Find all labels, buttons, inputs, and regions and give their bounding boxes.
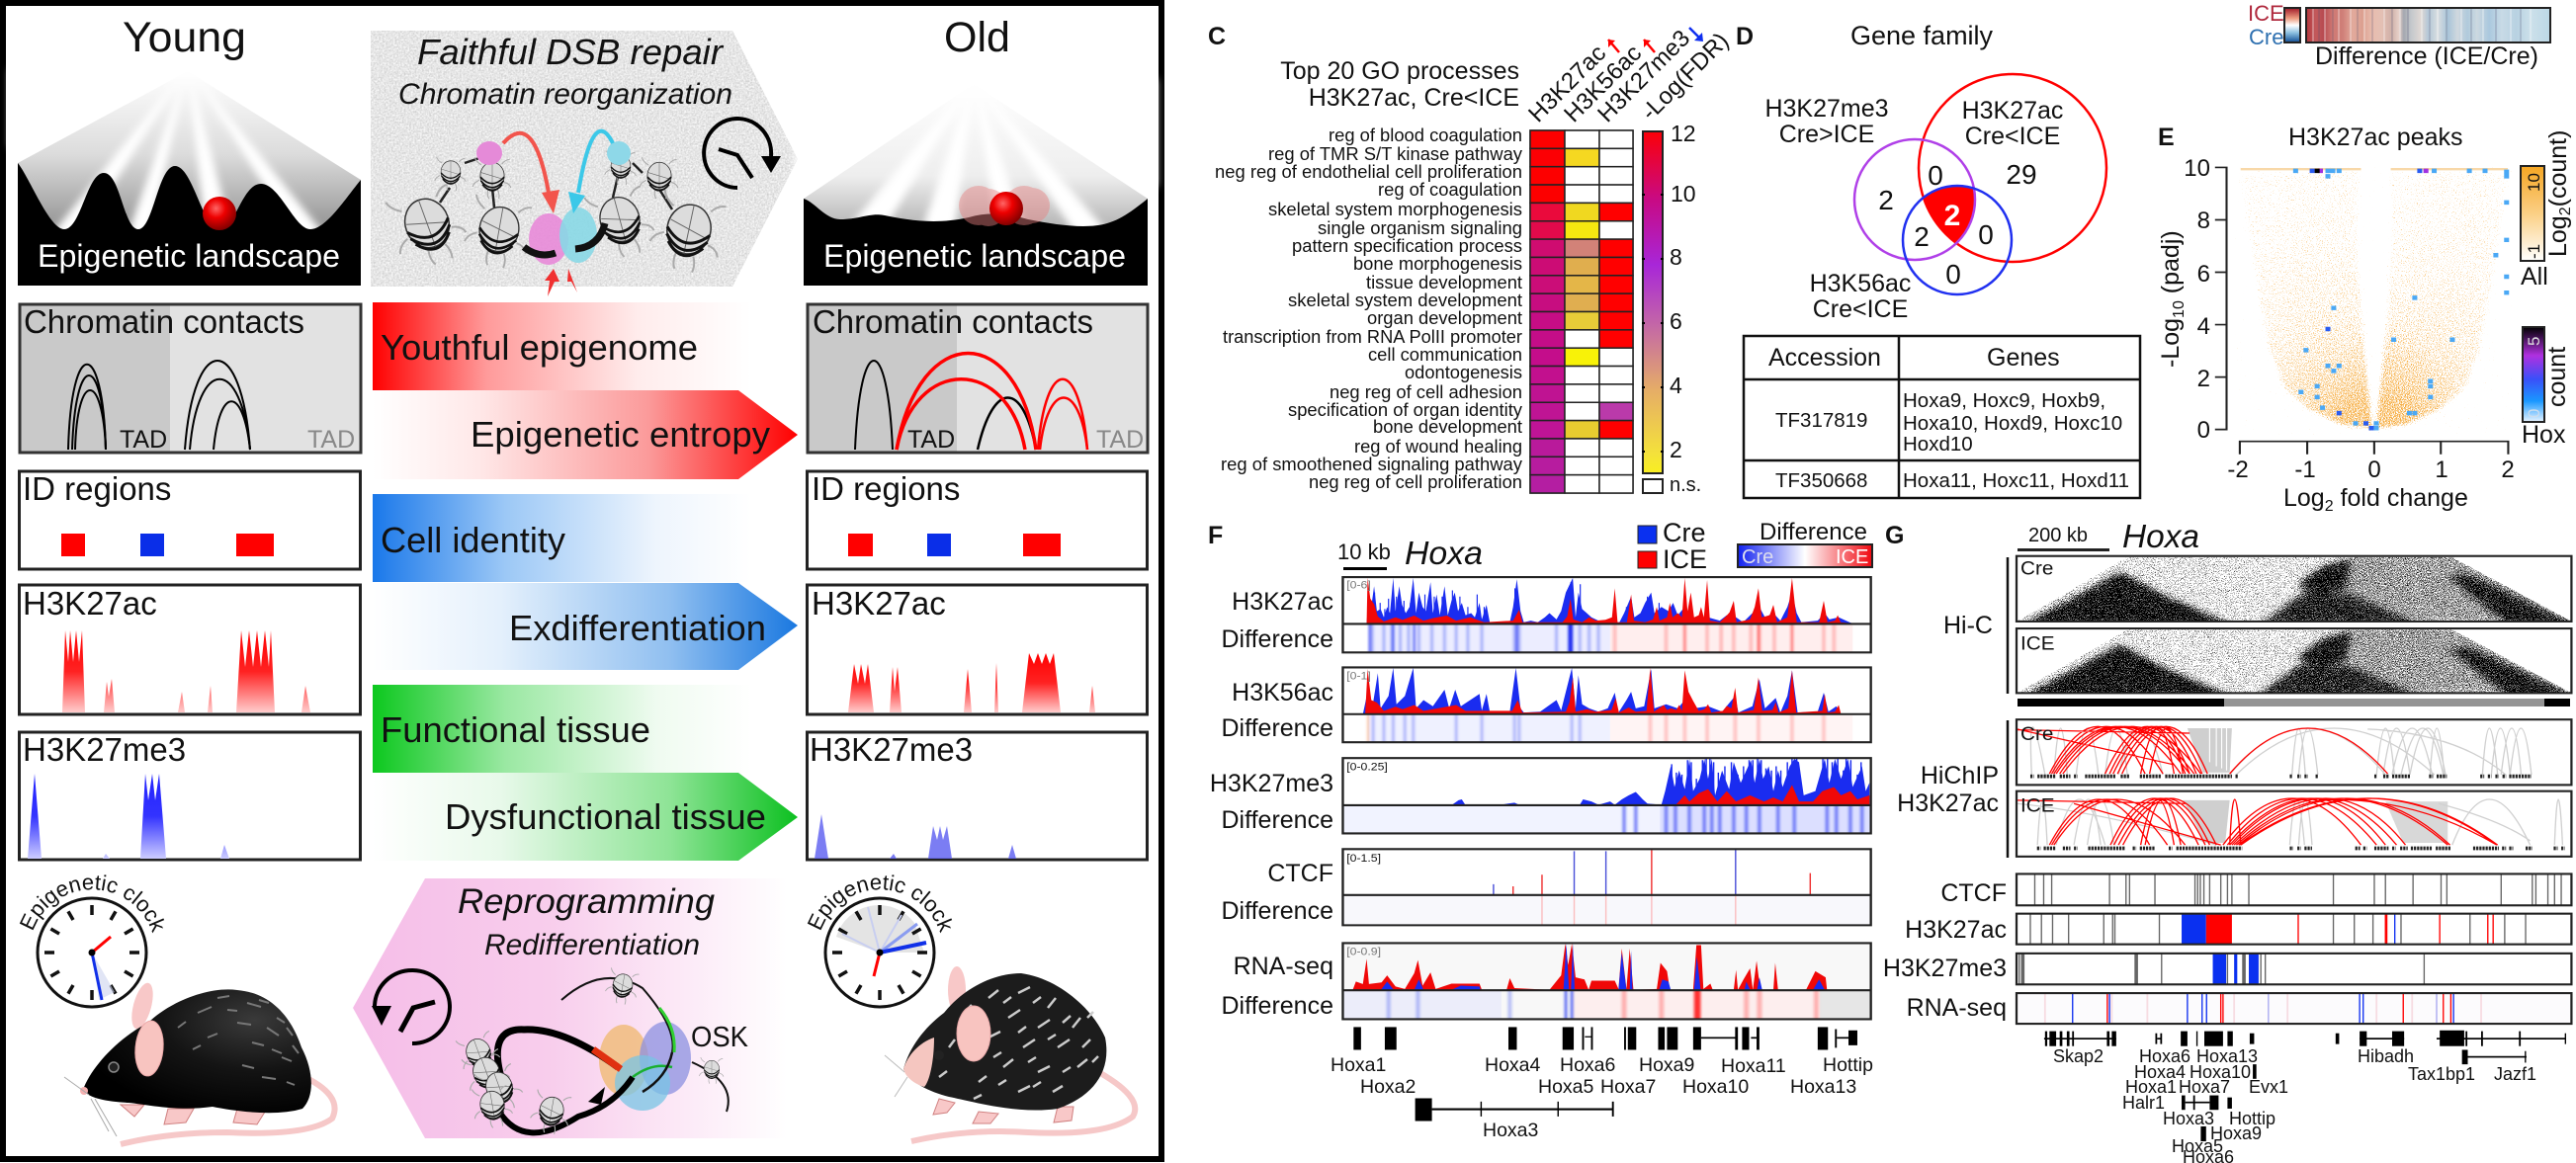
row labels: reg of wound healing: [1354, 437, 1522, 457]
band: cell identity: Cell identity: [381, 520, 565, 560]
legend: difference ICE/Cre colorbar: Cre: [2249, 25, 2283, 49]
row labels: tissue development: [1366, 273, 1522, 292]
venn diagram: 0: [1928, 160, 1943, 191]
brackets and row labels: CTCF: [1940, 879, 2007, 907]
gene models: Hoxa (F): Hoxa1: [1331, 1054, 1386, 1076]
heading: Young: Young: [123, 14, 246, 61]
row labels: neg reg of cell proliferation: [1309, 472, 1522, 492]
epigenetic landscape: young: [10, 65, 368, 286]
gene models: Hoxa (F): Hoxa6: [1560, 1054, 1615, 1076]
panel: ID regions old: ID regions: [812, 470, 960, 507]
track: H3K27ac: [1222, 577, 1871, 653]
track: CTCF: Difference: [1222, 897, 1333, 925]
legend: Hox peaks: count: [2543, 347, 2571, 407]
brackets and row labels: H3K27ac: [1897, 789, 1999, 817]
panel: ID regions young: ID regions: [23, 470, 171, 507]
panel E: volcano plot: -1: [2294, 457, 2316, 483]
axis titles: fold change: [2334, 484, 2468, 512]
colorbar: -Log(FDR): 10: [1671, 181, 1696, 207]
brackets and row labels: HiChIP: [1921, 762, 1999, 789]
axis titles: Log: [2283, 484, 2325, 512]
icon: epigenetic clock old: [807, 874, 953, 1008]
TAD domain bar: [2018, 699, 2570, 706]
gene models: Hoxa (F): Hoxa2: [1360, 1076, 1416, 1098]
gene models: Hoxa region (G): Tax1bp1: [2408, 1064, 2475, 1084]
gene models: Hoxa region (G): Hoxa3: [2163, 1109, 2214, 1128]
track: H3K56ac: Difference: [1222, 714, 1333, 742]
legend: Hox peaks: 0: [2525, 409, 2543, 418]
colorbar: -Log(FDR): 8: [1670, 244, 1682, 270]
table: accession and genes: Hoxd10: [1903, 433, 1973, 456]
heading: Hoxa: Hoxa: [1405, 535, 1483, 571]
gene models: Hoxa region (G): [2044, 1031, 2566, 1163]
axis tick labels: 6: [2197, 261, 2210, 288]
chart: Hi-C ICE heatmap: ICE: [2020, 633, 2055, 654]
axis titles: 2: [2325, 498, 2334, 515]
panel E: volcano plot: 10: [2171, 300, 2188, 318]
panel: ID regions old: [807, 470, 1147, 569]
gene models: Hoxa (F): Hoxa7: [1600, 1076, 1656, 1098]
epigenetic landscape: young: Epigenetic landscape: [38, 238, 340, 274]
row labels: organ development: [1367, 308, 1522, 328]
panel: H3K27me3 old: H3K27me3: [810, 731, 973, 768]
chromatin illustration: [383, 131, 729, 296]
row labels: specification of organ identity: [1288, 400, 1522, 420]
table: accession and genes: TF317819: [1775, 409, 1867, 432]
axis tick labels: 10: [2184, 155, 2210, 182]
track: H3K56ac: H3K56ac: [1232, 679, 1333, 706]
row labels: bone development: [1373, 417, 1522, 437]
venn diagram: Cre<ICE: [1965, 123, 2060, 150]
panel E: volcano plot: 1: [2435, 457, 2448, 483]
label F: F: [1208, 522, 1223, 549]
row labels: bone morphogenesis: [1353, 254, 1522, 274]
gene models: Hoxa (F): Hoxa3: [1483, 1120, 1538, 1141]
track strip: H3K27me3: [2017, 954, 2571, 984]
gene models: Hoxa region (G): Jazf1: [2494, 1064, 2536, 1084]
legend: Difference: Cre: [1742, 546, 1773, 568]
row labels: neg reg of cell adhesion: [1330, 382, 1522, 402]
gene models: Hoxa region (G): Hoxa13: [2196, 1046, 2258, 1066]
panel E: volcano plot: (padj): [2157, 230, 2185, 300]
illustration: OSK reprogramming loop: [454, 967, 749, 1136]
gene models: Hoxa region (G): Skap2: [2053, 1046, 2104, 1066]
row labels: skeletal system development: [1288, 291, 1522, 310]
legend: Difference: [1738, 519, 1872, 568]
panel: H3K27ac old: [807, 585, 1147, 714]
panel G: Hoxa 3D genome tracks: [1883, 518, 2576, 1163]
row labels: reg of blood coagulation: [1329, 125, 1522, 145]
heading: Hoxa: Hoxa: [2122, 518, 2199, 554]
track: RNA-seq: [1222, 943, 1871, 1020]
track: CTCF: [0-1.5]: [1346, 852, 1381, 865]
heading: Gene family: Gene family: [1850, 21, 1994, 50]
chart: Hi-C ICE heatmap: [2012, 625, 2576, 698]
gene models: Hoxa region (G): Hoxa1: [2125, 1077, 2177, 1097]
row labels: transcription from RNA PolII promoter: [1223, 327, 1522, 347]
gene models: Hoxa region (G): Hibadh: [2358, 1046, 2414, 1066]
panel D: gene family venn and table: [1736, 21, 2140, 498]
panel: H3K27ac old: H3K27ac: [812, 585, 946, 622]
track: H3K27me3: [1210, 758, 1871, 834]
icon: epigenetic clock young: [20, 874, 164, 1008]
label C: C: [1208, 23, 1226, 50]
brackets and row labels: RNA-seq: [1907, 994, 2007, 1022]
legend: Hox peaks: [2522, 327, 2571, 449]
gene models: Hoxa region (G): Hoxa7: [2179, 1077, 2230, 1097]
venn diagram: H3K27ac: [1962, 97, 2063, 125]
track: RNA-seq: RNA-seq: [1234, 953, 1333, 980]
legend: difference ICE/Cre colorbar: Difference (ICE/Cre): [2315, 42, 2538, 70]
panel: chromatin contacts young: TAD: [120, 426, 167, 454]
axis tick labels: 8: [2197, 208, 2210, 234]
gene models: Hoxa region (G): Hoxa10: [2190, 1062, 2251, 1082]
central hexagon: faithful DSB repair: Chromatin reorganization: [398, 78, 732, 111]
venn diagram: 0: [1945, 259, 1961, 290]
legend: Cre ICE: ICE: [1663, 544, 1707, 574]
column headers: [1523, 25, 1734, 127]
legend: Cre ICE: Cre: [1663, 518, 1706, 547]
gene models: Hoxa region (G): Halr1: [2122, 1093, 2165, 1113]
band: cell identity: [373, 494, 751, 582]
arrow: epigenetic entropy: [373, 390, 798, 479]
band: functional tissue: [373, 685, 751, 773]
track: CTCF: CTCF: [1267, 860, 1333, 887]
volcano chart: [2215, 167, 2509, 455]
gene models: Hoxa region (G): Hoxa5: [2172, 1136, 2223, 1156]
band: youthful epigenome: [373, 302, 751, 390]
chart: HiChIP ICE arcs: ICE: [2020, 795, 2055, 816]
venn diagram: H3K56ac: [1810, 270, 1911, 297]
track: RNA-seq: Difference: [1222, 992, 1333, 1020]
brackets and row labels: H3K27ac: [1905, 916, 2007, 944]
track: CTCF: [1222, 849, 1871, 925]
table: accession and genes: Hoxa10, Hoxd9, Hoxc10: [1903, 412, 2122, 435]
row labels: reg of coagulation: [1378, 180, 1522, 200]
colorbar: -Log(FDR): 2: [1670, 437, 1682, 462]
legend: all peaks: All: [2521, 263, 2548, 291]
panel: H3K27me3 young: H3K27me3: [23, 731, 186, 768]
legend: difference ICE/Cre colorbar: ICE: [2248, 1, 2284, 26]
axis tick labels: 4: [2197, 313, 2210, 340]
panel: chromatin contacts old: TAD: [907, 426, 955, 454]
column headers: H3K27ac: [1523, 40, 1611, 127]
gene models: Hoxa (F): Hoxa11: [1721, 1055, 1786, 1077]
epigenetic landscape: old: [796, 79, 1157, 286]
track strip: CTCF: [2017, 873, 2571, 905]
venn diagram: 29: [2006, 159, 2037, 190]
colorbar: -Log(FDR): n.s.: [1670, 474, 1701, 496]
chart: HiChIP Cre arcs: [2017, 719, 2571, 785]
arrow: epigenetic entropy: Epigenetic entropy: [471, 414, 770, 455]
panel: H3K27me3 young: [20, 731, 360, 860]
chart: HiChIP ICE arcs: [2017, 791, 2571, 857]
venn diagram: Cre>ICE: [1779, 121, 1874, 148]
track: H3K27ac: Difference: [1222, 625, 1333, 653]
brackets and row labels: H3K27me3: [1883, 955, 2007, 982]
illustration: young mouse: [64, 980, 335, 1144]
track: H3K56ac: [1222, 667, 1871, 742]
axis tick labels: 2: [2197, 366, 2210, 392]
label D: D: [1736, 23, 1754, 50]
panel C: GO process heatmap: [1208, 23, 1734, 496]
venn diagram: H3K27me3: [1764, 95, 1889, 123]
venn diagram: Cre<ICE: [1813, 295, 1908, 323]
icon: epigenetic clock old: Epigenetic clock: [807, 874, 953, 933]
legend: all peaks: [2521, 130, 2574, 291]
row labels: neg reg of endothelial cell proliferation: [1215, 162, 1522, 182]
row labels: [1215, 125, 1522, 492]
panel: chromatin contacts young: Chromatin contacts: [24, 303, 304, 340]
row labels: skeletal system morphogenesis: [1268, 200, 1522, 219]
track: H3K27ac: [0-6]: [1346, 579, 1371, 591]
legend: all peaks: Log: [2544, 215, 2572, 257]
row labels: reg of smoothened signaling pathway: [1221, 455, 1522, 474]
heading: Top 20 GO processes: [1280, 57, 1519, 112]
arrow: exdifferentiation: Exdifferentiation: [509, 608, 766, 648]
row labels: single organism signaling: [1318, 218, 1522, 238]
heading: H3K27ac peaks: H3K27ac peaks: [2288, 124, 2463, 151]
gene models: Hoxa region (G): Evx1: [2249, 1077, 2288, 1097]
legend: difference ICE/Cre colorbar: [2248, 1, 2550, 70]
panel: chromatin contacts old: TAD: [1096, 426, 1144, 454]
gene models: Hoxa (F): Hoxa5: [1538, 1076, 1594, 1098]
illustration: old mouse: [885, 966, 1135, 1141]
brackets and row labels: Hi-C: [1943, 612, 1993, 639]
arrow: dysfunctional tissue: Dysfunctional tissue: [445, 796, 766, 837]
track: H3K27ac: H3K27ac: [1232, 588, 1333, 616]
colorbar: -Log(FDR): [1642, 121, 1701, 496]
panel E: volcano plot: -2: [2227, 457, 2249, 483]
gene models: Hoxa (F): Hoxa10: [1682, 1076, 1749, 1098]
venn diagram: 2: [1878, 185, 1894, 215]
row labels: reg of TMR S/T kinase pathway: [1268, 144, 1522, 164]
label E: E: [2158, 124, 2175, 151]
legend: all peaks: (count): [2544, 130, 2572, 207]
colorbar: -Log(FDR): 6: [1670, 308, 1682, 334]
table: accession and genes: Genes: [1987, 344, 2060, 372]
central hexagon: faithful DSB repair: [371, 31, 798, 296]
band: functional tissue: Functional tissue: [381, 709, 650, 750]
scale bar 200 kb: 200 kb: [2028, 525, 2088, 546]
track: H3K27me3: Difference: [1222, 806, 1333, 834]
gene models: Hoxa region (G): Hoxa6: [2139, 1046, 2190, 1066]
venn diagram: 0: [1978, 219, 1994, 250]
gene models: Hoxa (F): Hoxa4: [1485, 1054, 1541, 1076]
track strip: RNA-seq: [2017, 993, 2571, 1024]
scale bar 200 kb: [2018, 525, 2109, 551]
row labels: pattern specification process: [1292, 236, 1522, 256]
label G: G: [1885, 522, 1904, 549]
legend: Hox peaks: Hox: [2522, 421, 2566, 449]
track: H3K27me3: H3K27me3: [1210, 770, 1333, 797]
gene models: Hoxa (F): [1331, 1027, 1873, 1141]
panel: ID regions young: [20, 470, 360, 569]
band: youthful epigenome: Youthful epigenome: [381, 327, 698, 368]
panel: chromatin contacts young: [19, 303, 361, 454]
gene models: Hoxa (F): Hottip: [1823, 1054, 1873, 1076]
legend: all peaks: 10: [2525, 173, 2543, 192]
table: accession and genes: Accession: [1768, 344, 1881, 372]
row labels: odontogenesis: [1405, 363, 1522, 382]
heading: Old: Old: [944, 14, 1010, 61]
heading: Top 20 GO processes: H3K27ac, Cre<ICE: [1309, 84, 1519, 112]
legend: all peaks: -1: [2525, 244, 2543, 259]
central hexagon: faithful DSB repair: Faithful DSB repair: [417, 32, 725, 72]
panel E: volcano plot: 0: [2367, 457, 2381, 483]
legend: Difference: ICE: [1836, 546, 1868, 568]
panel E: volcano plot: 2: [2501, 457, 2515, 483]
axis tick labels: [2184, 155, 2210, 444]
legend: Cre ICE: [1638, 518, 1707, 574]
panel E: volcano plot: [2157, 124, 2574, 515]
colorbar: -Log(FDR): 12: [1671, 121, 1696, 146]
panel: chromatin contacts old: [807, 303, 1148, 454]
track strip: H3K27ac: [2017, 914, 2571, 945]
epigenetic landscape: old: Epigenetic landscape: [823, 238, 1126, 274]
chart: HiChIP Cre arcs: Cre: [2020, 724, 2053, 745]
column headers: H3K56ac: [1559, 40, 1647, 127]
pentagon: reprogramming redifferentiation: [353, 878, 787, 1138]
legend: all peaks: 2: [2557, 207, 2574, 215]
gene models: Hoxa region (G): Hottip: [2229, 1109, 2275, 1128]
heading: Top 20 GO processes: Top 20 GO processes: [1280, 57, 1519, 85]
panel: chromatin contacts old: Chromatin contacts: [813, 303, 1093, 340]
panel: H3K27ac young: [20, 585, 360, 714]
panel F: Hoxa locus tracks: [1208, 518, 1873, 1141]
table: accession and genes: Hoxa11, Hoxc11, Hoxd11: [1903, 469, 2129, 492]
panel: H3K27me3 old: [807, 731, 1147, 860]
legend: Difference: Difference: [1760, 519, 1867, 545]
panel: H3K27ac young: H3K27ac: [23, 585, 157, 622]
arrow: dysfunctional tissue: [373, 773, 798, 861]
illustration: OSK reprogramming loop: OSK: [691, 1022, 749, 1053]
column headers: H3K27me3: [1592, 25, 1695, 127]
venn diagram: [1764, 74, 2106, 323]
table: accession and genes: Hoxa9, Hoxc9, Hoxb9,: [1903, 389, 2105, 412]
pentagon: reprogramming redifferentiation: Redifferentiation: [484, 929, 700, 961]
pentagon: reprogramming redifferentiation: Reprogramming: [458, 882, 716, 921]
panel E: volcano plot: -Log: [2157, 318, 2185, 368]
heatmap cells: [1530, 130, 1633, 493]
gene models: Hoxa region (G): Hoxa9: [2210, 1123, 2262, 1143]
track: H3K56ac: [0-1]: [1346, 670, 1371, 682]
column headers: -Log(FDR): [1636, 28, 1734, 125]
gene models: Hoxa (F): Hoxa9: [1639, 1054, 1694, 1076]
gene models: Hoxa (F): Hoxa13: [1790, 1076, 1856, 1098]
icon: epigenetic clock young: Epigenetic clock: [20, 874, 164, 933]
gene models: Hoxa region (G): Hoxa4: [2134, 1062, 2186, 1082]
icon: clock forward: [704, 119, 781, 188]
brackets and row labels: [1883, 557, 2008, 1022]
chart: Hi-C Cre heatmap: [2012, 553, 2576, 625]
colorbar: -Log(FDR): 4: [1670, 373, 1682, 398]
axis tick labels: 0: [2197, 417, 2210, 444]
table: accession and genes: TF350668: [1775, 469, 1867, 492]
chart: Hi-C Cre heatmap: Cre: [2020, 558, 2053, 579]
row labels: cell communication: [1368, 345, 1522, 365]
venn diagram: 2: [1944, 200, 1960, 232]
venn diagram: 2: [1914, 221, 1930, 252]
panel: graphical summary young vs old: [0, 0, 1164, 1162]
track: RNA-seq: [0-0.9]: [1346, 946, 1381, 957]
table: accession and genes: [1744, 336, 2140, 498]
icon: clock backward: [372, 970, 450, 1043]
scale bar 10 kb: 10 kb: [1337, 540, 1391, 564]
arrow: exdifferentiation: [373, 583, 798, 670]
track: H3K27me3: [0-0.25]: [1346, 761, 1388, 774]
legend: Hox peaks: 5: [2525, 337, 2543, 346]
panel: chromatin contacts young: TAD: [307, 426, 355, 454]
